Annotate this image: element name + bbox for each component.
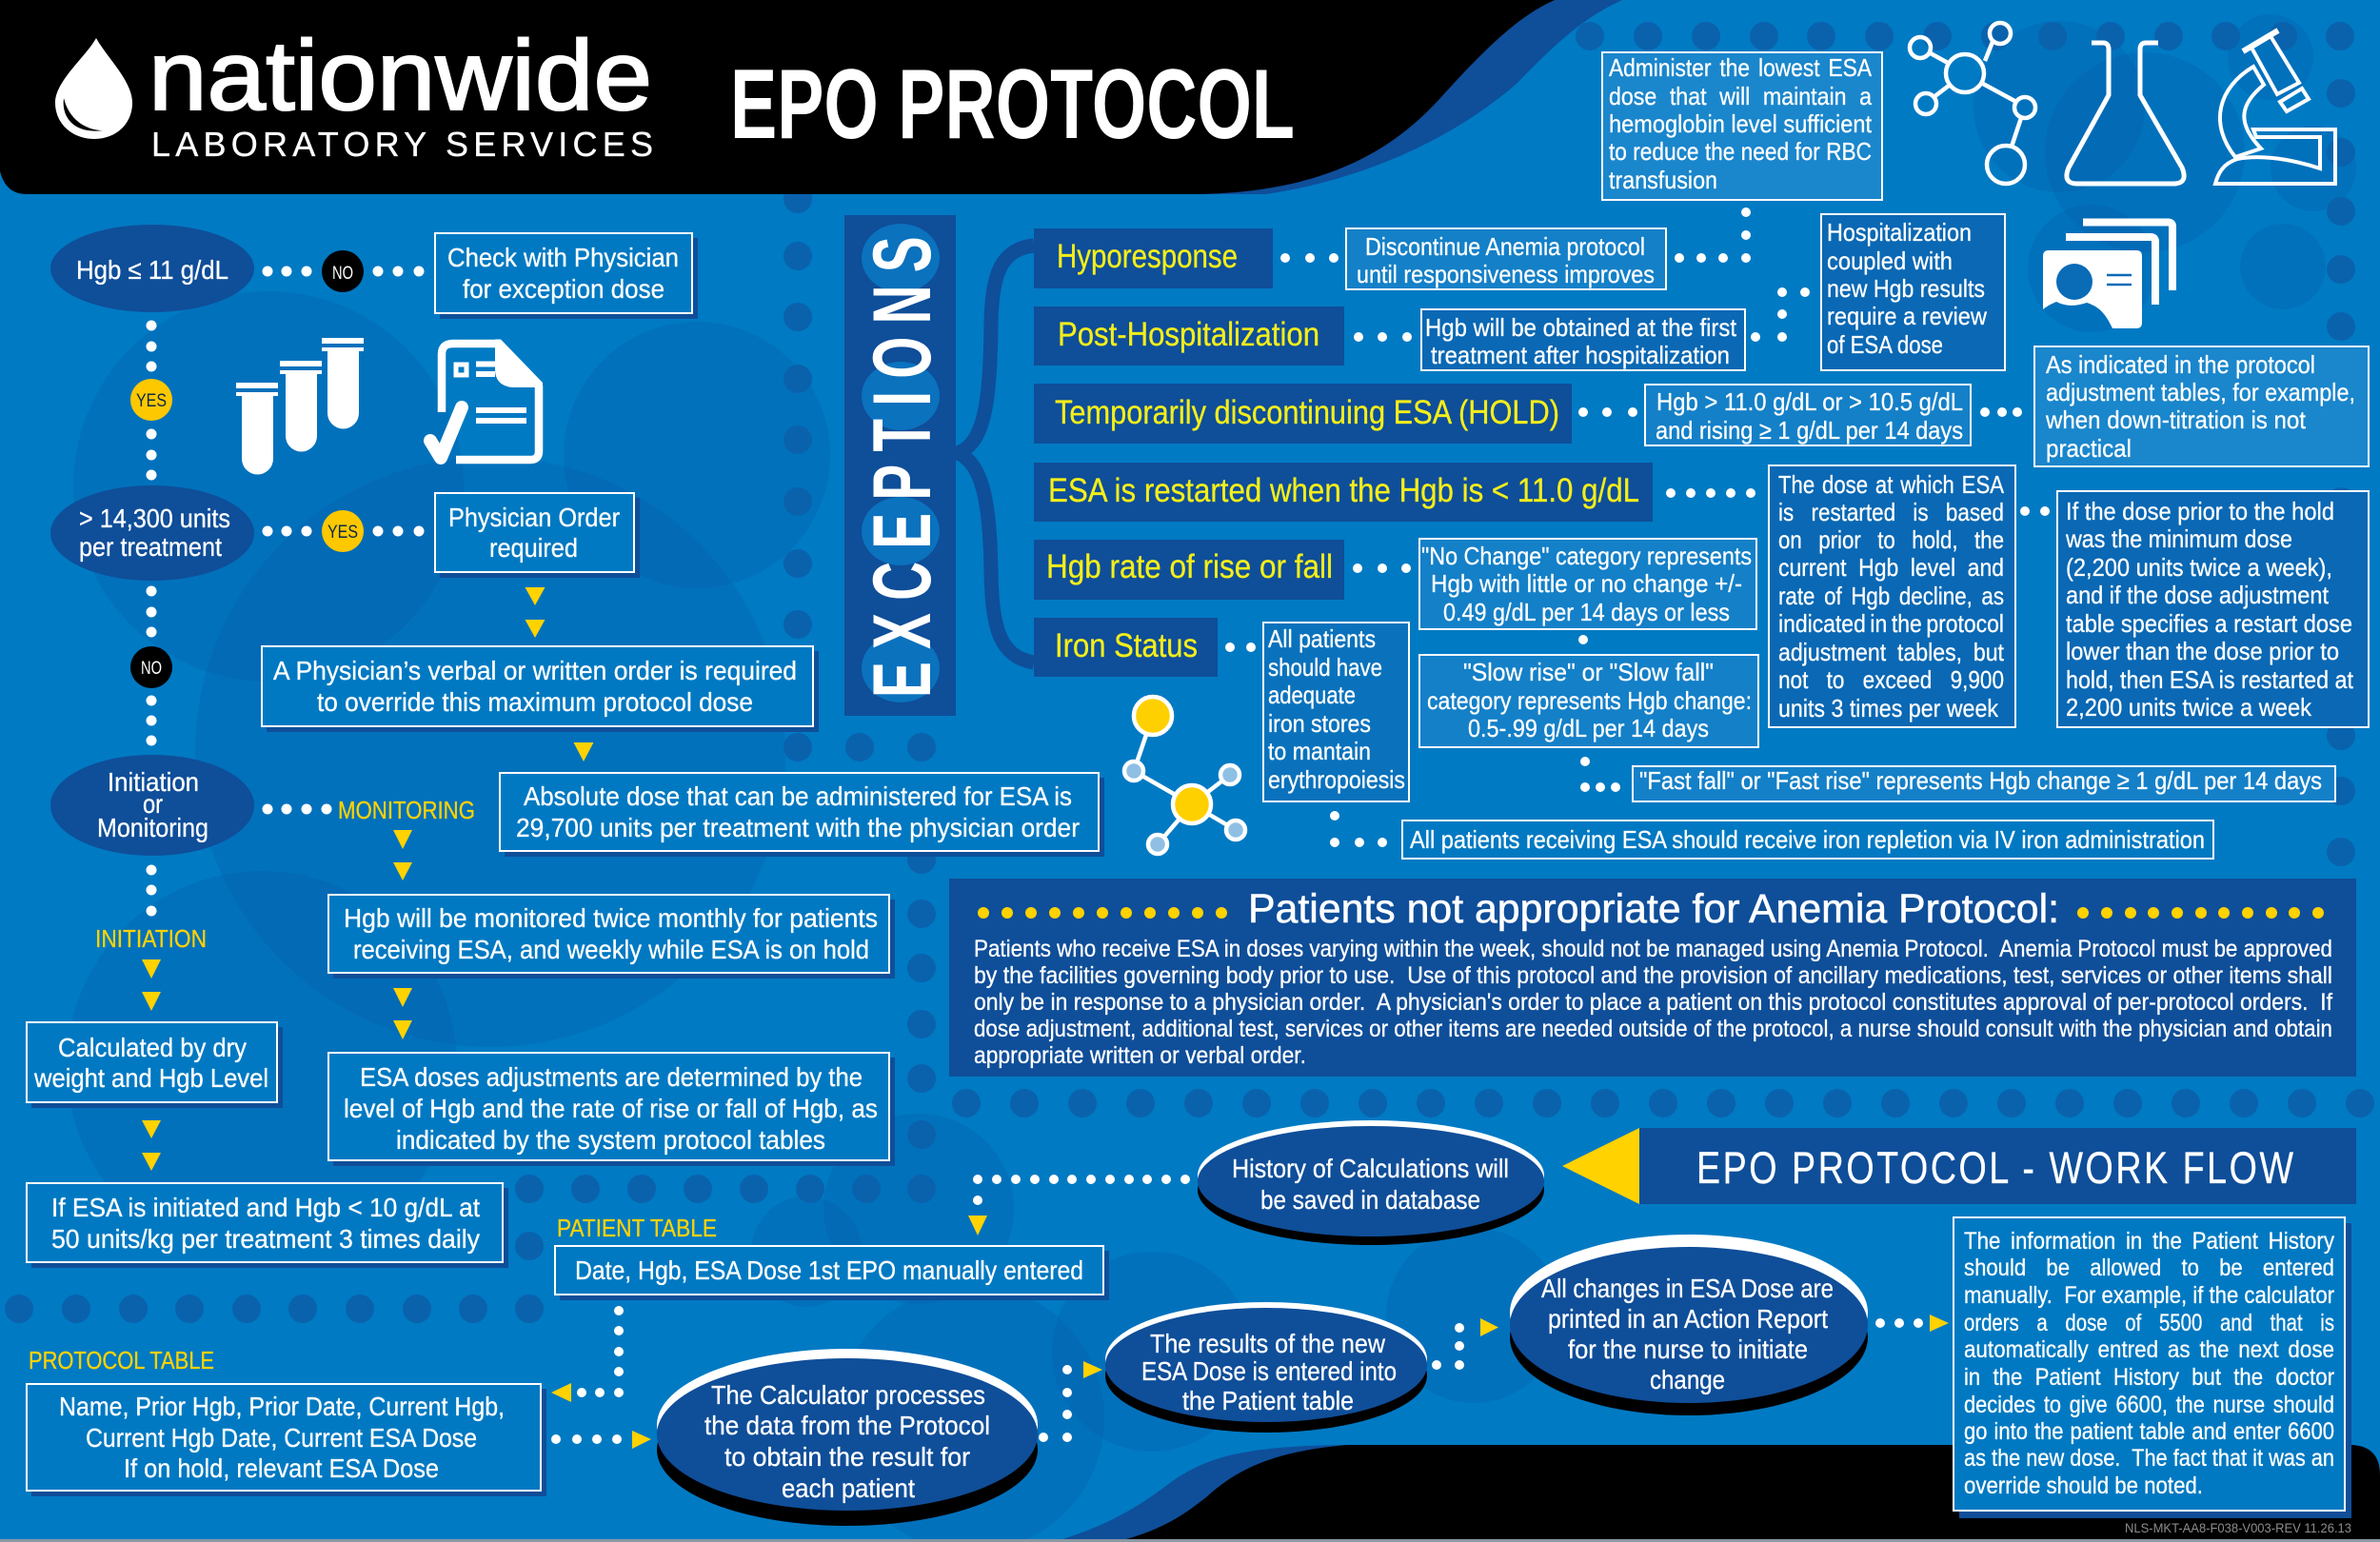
connector: action report to history note: [1875, 1318, 1923, 1328]
logo: nationwide laboratory services: [55, 21, 653, 164]
box: administer lowest dose: transfusion: [1609, 166, 1717, 194]
box: minimum dose restart: lower than the dose prior to: [2066, 637, 2339, 665]
box: protocol table fields: [27, 1384, 546, 1496]
arrow: down to patient table: [968, 1216, 987, 1236]
arrow: right to history note: [1930, 1315, 1949, 1332]
box: discontinue: until responsiveness improves: [1357, 260, 1655, 288]
workflow ellipse: action report: [1510, 1235, 1868, 1415]
box: dose at restart: The dose at which ESA: [1778, 470, 2005, 499]
box: minimum dose restart: If the dose prior to the hold: [2066, 497, 2334, 525]
badge: YES: YES: [327, 523, 358, 543]
label: monitoring: MONITORING: [338, 796, 475, 824]
connector: restarted to dose box: [1666, 488, 1755, 498]
workflow ellipse: calculator: [657, 1349, 1038, 1526]
box: physician order required: Physician Order: [448, 503, 620, 532]
box: no change category: 0.49 g/dL per 14 days or less: [1443, 598, 1730, 626]
box: absolute dose: [500, 773, 1104, 857]
connector: iron status: [1225, 642, 1256, 652]
box: administer lowest dose: Administer the lowest ESA: [1609, 53, 1873, 82]
exception: ESA restarted: ESA is restarted when the Hgb is < 11.0 g/dL: [1048, 472, 1639, 509]
badge: NO: NO: [332, 264, 353, 284]
box: dose at restart: rate of Hgb decline, as: [1778, 582, 2004, 610]
box: if ESA is initiated: [27, 1183, 508, 1268]
box: hospitalization review: new Hgb results: [1827, 274, 1985, 303]
box: hospitalization review: require a review: [1827, 302, 1987, 330]
label: protocol table: PROTOCOL TABLE: [29, 1346, 214, 1374]
decision ellipse: units per treatment: [50, 485, 254, 581]
connector: units to YES: [263, 525, 425, 537]
arrows: monitored down: [393, 988, 412, 1039]
icon: yellow molecule: [1124, 697, 1245, 854]
title: EPO PROTOCOL: [730, 49, 1295, 160]
box: dose at restart: [1769, 465, 2015, 727]
box: dose at restart: on prior to hold, the: [1778, 525, 2004, 554]
box: as indicated in protocol: As indicated in the protocol: [2046, 350, 2315, 379]
box: patient history note: as the new dose. The fact that it was an: [1964, 1445, 2334, 1472]
workflow ellipse: results: the Patient table: [1182, 1386, 1354, 1415]
box: minimum dose restart: table specifies a restart dose: [2066, 609, 2352, 638]
badge: NO: [322, 250, 364, 292]
logo wordmark: nationwide: [149, 21, 652, 131]
box: if ESA is initiated: 50 units/kg per treatment 3 times daily: [51, 1224, 480, 1254]
box: check with physician: [435, 233, 698, 319]
box: patient history note: manually. For example, if the calculator: [1964, 1282, 2334, 1309]
connector: to monitoring: [263, 803, 331, 815]
box: Hgb at first treatment: [1421, 309, 1745, 370]
box: dose at restart: not to exceed 9,900: [1778, 665, 2004, 694]
connector: results to action report: [1432, 1323, 1464, 1370]
badge: YES: [130, 379, 172, 421]
box: absolute dose: 29,700 units per treatment with the physician order: [516, 813, 1080, 842]
bracket: exceptions brace: [958, 246, 1034, 662]
workflow ellipse: calculator: the data from the Protocol: [704, 1411, 990, 1440]
box: iron stores: iron stores: [1268, 709, 1371, 738]
connector: units no vertical: [147, 586, 156, 746]
workflow ellipse: calculator: each patient: [782, 1473, 915, 1503]
workflow ellipse: action report: printed in an Action Report: [1548, 1304, 1828, 1334]
box: iron stores: adequate: [1268, 681, 1356, 709]
workflow ellipse: history database: [1198, 1120, 1544, 1245]
exception: Hgb rate: [1034, 540, 1344, 600]
box: no change category: Hgb with little or no change +/-: [1431, 569, 1742, 598]
connector: threshold to protocol tables note: [1980, 407, 2022, 417]
decision ellipse: units per treatment: per treatment: [79, 532, 222, 562]
box: protocol table fields: Current Hgb Date, Current ESA Dose: [86, 1423, 477, 1453]
box: calculated by dry weight: weight and Hgb Level: [33, 1063, 268, 1093]
exception: hyporesponse: [1034, 228, 1273, 288]
workflow ellipse: action report: change: [1650, 1365, 1725, 1394]
panel heading: Patients not appropriate for Anemia Protocol:: [1248, 886, 2059, 932]
panel body text: appropriate written or verbal order.: [974, 1042, 1306, 1069]
workflow ellipse: results: ESA Dose is entered into: [1141, 1356, 1397, 1386]
box: dose at restart: current Hgb level and: [1778, 553, 2004, 582]
arrow: right to calculator: [632, 1431, 651, 1449]
box: patient history note: override should be noted.: [1964, 1473, 2203, 1499]
connector: protocol table to calculator: [551, 1434, 622, 1444]
connector: to hospitalization box: [1751, 287, 1810, 342]
box: physician's order: [262, 646, 819, 732]
panel: work flow heading: [1562, 1128, 2356, 1204]
connector: slow rise to fast fall: [1580, 757, 1620, 792]
logo tagline: LABORATORY SERVICES: [151, 125, 653, 164]
box: check with physician: Check with Physician: [447, 243, 679, 272]
box: patient table fields: [555, 1246, 1109, 1300]
box: dose at restart: adjustment tables, but: [1778, 638, 2005, 666]
exception: hyporesponse: Hyporesponse: [1057, 238, 1238, 275]
box: fast fall category: "Fast fall" or "Fast rise" represents Hgb change ≥ 1 g/dL per 14 days: [1639, 766, 2322, 795]
box: minimum dose restart: 2,200 units twice a week: [2066, 693, 2312, 722]
box: slow rise category: 0.5-.99 g/dL per 14 days: [1468, 714, 1709, 742]
icon: flask: [2067, 43, 2184, 184]
box: ESA dose adjustments: [328, 1053, 895, 1166]
badge: YES: YES: [136, 391, 167, 411]
workflow ellipse: action report: for the nurse to initiate: [1568, 1334, 1808, 1364]
box: ESA dose adjustments: ESA doses adjustments are determined by the: [360, 1062, 863, 1092]
box: slow rise category: "Slow rise" or "Slow fall": [1463, 658, 1714, 686]
box: calculated by dry weight: [27, 1022, 283, 1108]
decision ellipse: initiation or monitoring: or: [143, 789, 163, 819]
connector: hold to Hgb threshold: [1578, 407, 1637, 417]
box: Hgb hold threshold: Hgb > 11.0 g/dL or > 10.5 g/dL: [1656, 387, 1963, 416]
box: patient table fields: Date, Hgb, ESA Dose 1st EPO manually entered: [575, 1255, 1083, 1285]
connector: hyporesponse to discontinue: [1280, 253, 1339, 263]
box: iron stores: to mantain: [1268, 737, 1371, 765]
box: slow rise category: category represents Hgb change:: [1427, 686, 1752, 715]
arrow: right to results: [1083, 1361, 1102, 1378]
box: patient history note: decides to give 6600, the nurse should: [1964, 1392, 2334, 1418]
connector: to initiation: [147, 864, 156, 916]
workflow ellipse: calculator: to obtain the result for: [724, 1442, 970, 1472]
box: patient history note: should be allowed to be entered: [1964, 1255, 2334, 1281]
box: protocol table fields: Name, Prior Hgb, Prior Date, Current Hgb,: [59, 1392, 505, 1421]
panel: patients not appropriate: [949, 879, 2356, 1077]
decision ellipse: initiation or monitoring: Monitoring: [97, 813, 208, 842]
box: dose at restart: indicated in the protocol: [1778, 609, 2004, 638]
icon: microscope: [2215, 30, 2335, 184]
connector: calculator to results: [1039, 1365, 1072, 1442]
workflow ellipse: results: The results of the new: [1150, 1329, 1386, 1358]
box: Hgb hold threshold: and rising ≥ 1 g/dL per 14 days: [1656, 416, 1963, 445]
box: hospitalization review: of ESA dose: [1827, 330, 1943, 359]
box: minimum dose restart: was the minimum dose: [2065, 524, 2292, 553]
box: discontinue: [1346, 228, 1666, 289]
workflow ellipse: calculator: The Calculator processes: [711, 1380, 985, 1410]
box: administer lowest dose: [1602, 52, 1882, 200]
arrows: down to physician's order: [526, 587, 545, 638]
box: as indicated in protocol: adjustment tables, for example,: [2046, 378, 2355, 406]
panel: work flow heading: EPO PROTOCOL - WORK FLOW: [1696, 1143, 2295, 1194]
box: physician order required: required: [489, 533, 578, 563]
label: patient table: PATIENT TABLE: [557, 1214, 717, 1242]
arrow: left to protocol table: [551, 1383, 571, 1402]
box: iron repletion: All patients receiving ESA should receive iron repletion via IV iron administration: [1410, 825, 2205, 854]
workflow ellipse: history database: be saved in database: [1260, 1185, 1480, 1215]
badge: YES: [322, 510, 364, 552]
connector: iron to repletion: [1330, 811, 1387, 847]
box: dose at restart: is restarted is based: [1778, 498, 2004, 526]
box: administer lowest dose: dose that will maintain a: [1609, 82, 1872, 110]
box: minimum dose restart: hold, then ESA is restarted at: [2066, 665, 2354, 694]
box: Hgb monitored: Hgb will be monitored twice monthly for patients: [344, 903, 878, 933]
panel: exceptions vertical heading: EXCEPTIONS: [857, 224, 948, 698]
arrow: down to absolute dose: [573, 742, 594, 761]
label: initiation: INITIATION: [95, 924, 207, 953]
connector dot: [1578, 635, 1588, 644]
box: patient history note: [1954, 1217, 2351, 1518]
box: check with physician: for exception dose: [463, 274, 664, 304]
box: Hgb hold threshold: [1645, 385, 1971, 445]
exception: Hgb rate: Hgb rate of rise or fall: [1046, 548, 1333, 585]
decision ellipse: Hgb threshold: [50, 225, 254, 312]
box: as indicated in protocol: practical: [2046, 434, 2132, 463]
icon: molecule outline: [1910, 23, 2035, 184]
exception: temporarily discontinuing: [1034, 384, 1572, 444]
header banner: [0, 0, 1555, 194]
connector: Hgb to NO: [263, 267, 425, 276]
box: absolute dose: Absolute dose that can be administered for ESA is: [524, 781, 1072, 811]
box: iron stores: should have: [1268, 653, 1382, 682]
exception: temporarily discontinuing: Temporarily discontinuing ESA (HOLD): [1055, 394, 1559, 431]
box: iron repletion: [1402, 820, 2213, 859]
arrows: monitoring down: [393, 830, 412, 880]
box: ESA dose adjustments: level of Hgb and the rate of rise or fall of Hgb, as: [344, 1094, 878, 1123]
arrows: calculated down: [142, 1120, 161, 1171]
box: dose at restart: units 3 times per week: [1778, 694, 1999, 722]
box: protocol table fields: If on hold, relevant ESA Dose: [124, 1453, 439, 1483]
box: as indicated in protocol: [2034, 346, 2369, 466]
badge: NO: NO: [141, 659, 162, 679]
yellow dot rule left: [978, 907, 1227, 919]
exception: iron status: [1034, 618, 1218, 677]
box: minimum dose restart: (2,200 units twice a week),: [2066, 553, 2332, 582]
workflow ellipse: results: [1105, 1302, 1427, 1433]
box: patient history note: go into the patient table and enter 6600: [1964, 1418, 2334, 1445]
box: slow rise category: [1419, 655, 1758, 747]
box: hospitalization review: Hospitalization: [1827, 218, 1972, 247]
box: ESA dose adjustments: indicated by the system protocol tables: [396, 1125, 825, 1155]
decision ellipse: initiation or monitoring: [50, 755, 254, 856]
box: calculated by dry weight: Calculated by dry: [58, 1033, 247, 1062]
icon: patient record cards: [2043, 223, 2172, 328]
footer code: NLS-MKT-AA8-F038-V003-REV 11.26.13: [2125, 1520, 2351, 1535]
panel body text: [974, 936, 2332, 1069]
exception: ESA restarted: [1034, 463, 1653, 522]
box: hospitalization review: [1821, 214, 2005, 370]
box: no change category: [1419, 539, 1756, 629]
decision ellipse: units per treatment: > 14,300 units: [79, 504, 230, 533]
box: iron stores: All patients: [1268, 624, 1376, 653]
box: Hgb at first treatment: Hgb will be obtained at the first: [1425, 313, 1737, 342]
box: patient history note: in the Patient History but the doctor: [1964, 1364, 2334, 1391]
box: minimum dose restart: and if the dose adjustment: [2066, 581, 2330, 609]
badge: NO: [130, 646, 172, 688]
box: no change category: "No Change" category represents: [1421, 542, 1752, 570]
box: discontinue: Discontinue Anemia protocol: [1365, 232, 1645, 261]
arrows: initiation down: [142, 959, 161, 1011]
connector: dose box to minimum dose box: [2020, 506, 2050, 516]
decision ellipse: initiation or monitoring: Initiation: [108, 767, 199, 797]
icon: water drop: [55, 38, 132, 139]
exception: post-hospitalization: [1034, 306, 1344, 366]
box: physician's order: A Physician’s verbal or written order is required: [273, 656, 797, 685]
box: hospitalization review: coupled with: [1827, 247, 1953, 275]
connector: database to patient table: [973, 1175, 1190, 1205]
box: Hgb monitored: [328, 895, 895, 979]
box: Hgb monitored: receiving ESA, and weekly while ESA is on hold: [353, 935, 869, 964]
box: patient history note: The information in the Patient History: [1964, 1228, 2334, 1255]
box: iron stores: erythropoiesis: [1268, 765, 1405, 794]
box: administer lowest dose: to reduce the need for RBC: [1609, 137, 1872, 166]
box: administer lowest dose: hemoglobin level sufficient: [1609, 109, 1873, 138]
workflow ellipse: action report: All changes in ESA Dose are: [1541, 1274, 1834, 1303]
icon: document with check: [430, 339, 543, 460]
box: physician's order: to override this maximum protocol dose: [317, 687, 753, 717]
connector: patient table to protocol table: [577, 1306, 624, 1397]
decision ellipse: Hgb threshold: Hgb ≤ 11 g/dL: [76, 255, 228, 285]
icon: test tubes: [236, 338, 364, 474]
box: physician order required: [435, 493, 640, 578]
connector: post-hospitalization to box: [1354, 332, 1412, 342]
yellow dot rule right: [2077, 907, 2324, 919]
box: patient history note: automatically entred as the next dose: [1964, 1336, 2334, 1363]
exception: post-hospitalization: Post-Hospitalization: [1058, 316, 1319, 353]
connector: Hgb yes vertical: [147, 320, 156, 480]
arrow: right to action report: [1480, 1318, 1498, 1336]
box: Hgb at first treatment: treatment after hospitalization: [1431, 341, 1730, 369]
connector: rate to no change: [1353, 563, 1411, 573]
box: iron stores: [1263, 623, 1409, 801]
box: if ESA is initiated: If ESA is initiated and Hgb < 10 g/dL at: [51, 1193, 480, 1222]
box: minimum dose restart: [2057, 491, 2369, 727]
exception: iron status: Iron Status: [1055, 627, 1198, 664]
box: as indicated in protocol: when down-titration is not: [2045, 405, 2307, 434]
connector: discontinue to administer: [1675, 208, 1751, 263]
workflow ellipse: history database: History of Calculations will: [1232, 1154, 1509, 1183]
